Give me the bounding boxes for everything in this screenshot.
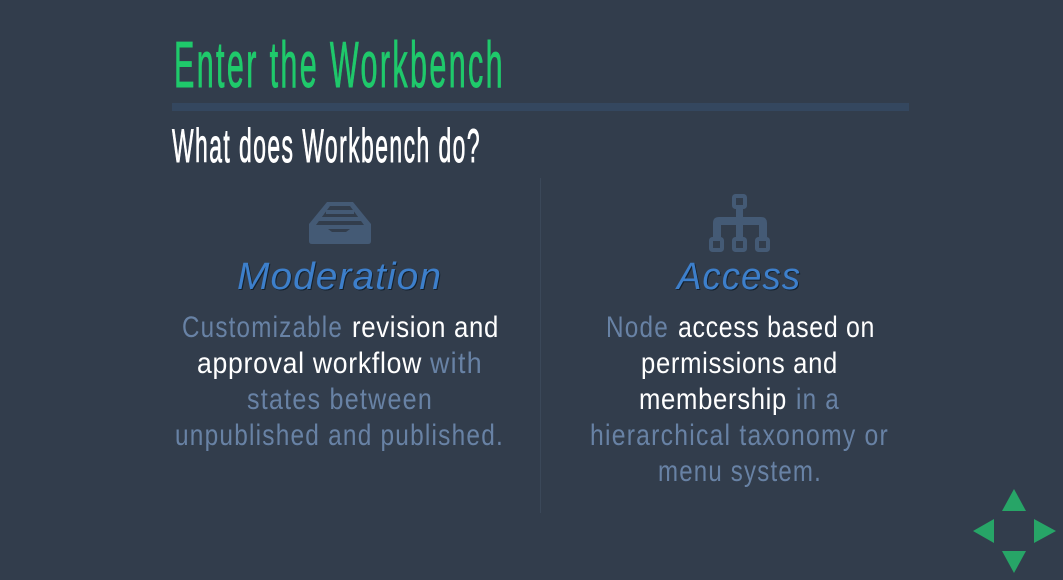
panel: moderation bbox=[175, 202, 504, 452]
text block: moderation description: unpublished and published. bbox=[175, 419, 504, 452]
icon: navigation arrows bbox=[973, 489, 1056, 573]
text block: access description: Node bbox=[606, 311, 669, 344]
icon: hierarchy tree bbox=[711, 196, 768, 250]
text block: moderation description bbox=[175, 311, 504, 452]
text block: access description bbox=[590, 311, 889, 488]
icon: inbox tray bbox=[309, 202, 371, 244]
text: Enter the Workbench bbox=[174, 28, 505, 101]
text block: moderation description: states between bbox=[247, 383, 433, 416]
heading: access: Access bbox=[675, 256, 801, 298]
text block: access description: membership bbox=[639, 383, 787, 416]
text block: access description: permissions and bbox=[641, 347, 838, 380]
text block: access description: in a bbox=[796, 383, 840, 416]
text block: moderation description: Customizable bbox=[182, 311, 343, 344]
heading: moderation: Moderation bbox=[238, 257, 443, 299]
text block: moderation description: with bbox=[429, 347, 483, 380]
text block: access description: hierarchical taxonomy or bbox=[590, 419, 889, 452]
heading: moderation: Moderation bbox=[237, 256, 442, 298]
panel: access bbox=[590, 196, 889, 488]
text block: moderation description: revision and bbox=[352, 311, 499, 344]
heading: access: Access bbox=[676, 257, 802, 299]
text block: moderation description: approval workflow bbox=[197, 347, 422, 380]
text block: access description: menu system. bbox=[658, 455, 822, 488]
text: What does Workbench do? bbox=[172, 119, 481, 172]
text block: access description: access based on bbox=[678, 311, 875, 344]
